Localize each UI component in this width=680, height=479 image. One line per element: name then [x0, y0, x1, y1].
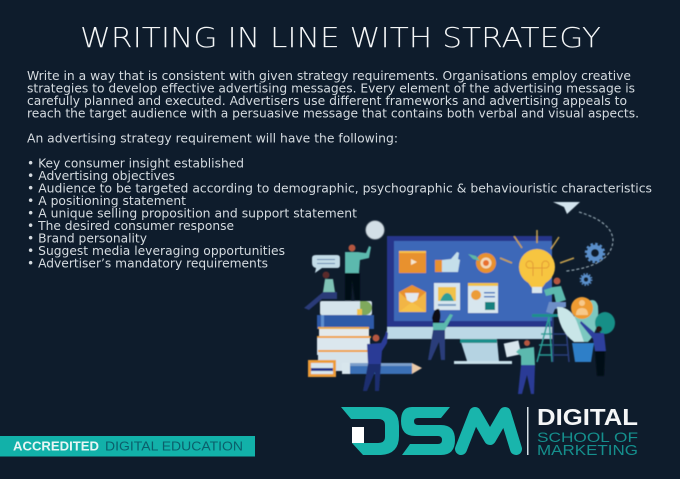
illustration: marketing team around a computer: [304, 202, 615, 394]
person: sitting on ladder platform: [544, 278, 566, 314]
bullet list: • The desired consumer response: [27, 219, 234, 233]
dashed flight path: [566, 212, 613, 271]
lightbulb rays: [500, 230, 574, 263]
accreditation banner: DIGITAL EDUCATION: [105, 440, 243, 454]
book stack: [317, 301, 374, 371]
person: sitting on books: [304, 272, 337, 310]
bullet list: • Audience to be targeted according to demographic, psychographic & behaviouristic characteristics: [27, 182, 652, 196]
icon: large gear: [586, 244, 604, 262]
ladders: [532, 314, 569, 362]
monitor: [387, 236, 552, 364]
person: woman reaching to badge: [580, 321, 606, 376]
bullet list: • Suggest media leveraging opportunities: [27, 244, 285, 258]
accreditation banner: [0, 436, 255, 456]
list intro: An advertising strategy requirement will have the following:: [27, 132, 398, 146]
icon: picture card: [434, 283, 460, 310]
logo: DSM Digital School of Marketing: [341, 404, 638, 459]
bullet list: • Key consumer insight established: [27, 156, 244, 170]
speech bubble: [312, 255, 340, 273]
intro paragraph: carefully planned and executed. Advertisers use different frameworks and advertising appeals to: [27, 94, 627, 108]
icon: thumbs up: [435, 252, 460, 272]
icon: envelope: [399, 285, 426, 312]
logo text: Marketing: MARKETING: [537, 442, 638, 459]
logo text: School of: SCHOOL OF: [537, 429, 638, 445]
title: WRITING IN LINE WITH STRATEGY: [80, 22, 601, 54]
lightbulb: [519, 249, 555, 293]
intro paragraph: strategies to develop effective advertising messages. Every element of the advertising message is: [27, 82, 635, 96]
icon: user badge: [571, 297, 593, 319]
person: woman touching screen: [428, 309, 453, 360]
icon: video tile: [399, 251, 426, 273]
bullet list: • Advertiser’s mandatory requirements: [27, 257, 268, 271]
magnifying circle: [366, 220, 384, 240]
bullet list: • Advertising objectives: [27, 169, 175, 183]
person: standing on books: [345, 244, 371, 300]
person: man with raised arm: [363, 331, 388, 391]
icon: small gear: [580, 274, 592, 285]
icon: target: [468, 253, 496, 273]
logo divider: [527, 407, 528, 455]
paper plane: [553, 202, 580, 214]
bullet list: • A unique selling proposition and support statement: [27, 207, 357, 221]
bullet list: [27, 156, 652, 271]
intro paragraph: Write in a way that is consistent with given strategy requirements. Organisations employ creative: [27, 69, 631, 83]
bullet list: • Brand personality: [27, 232, 147, 246]
intro paragraph: reach the target audience with a persuasive message that contains both verbal and visual aspects.: [27, 106, 639, 120]
logo mark: DSM: [341, 407, 516, 455]
accreditation banner: ACCREDITED: [13, 440, 99, 454]
icon: photo frame: [308, 360, 336, 377]
icon: chart card: [468, 283, 498, 313]
logo text: Digital: DIGITAL: [537, 404, 638, 430]
person: man holding document: [504, 340, 535, 394]
plant in pot: [557, 300, 615, 362]
intro paragraph: [27, 69, 639, 120]
bullet list: • A positioning statement: [27, 194, 186, 208]
pencil: [342, 363, 422, 374]
